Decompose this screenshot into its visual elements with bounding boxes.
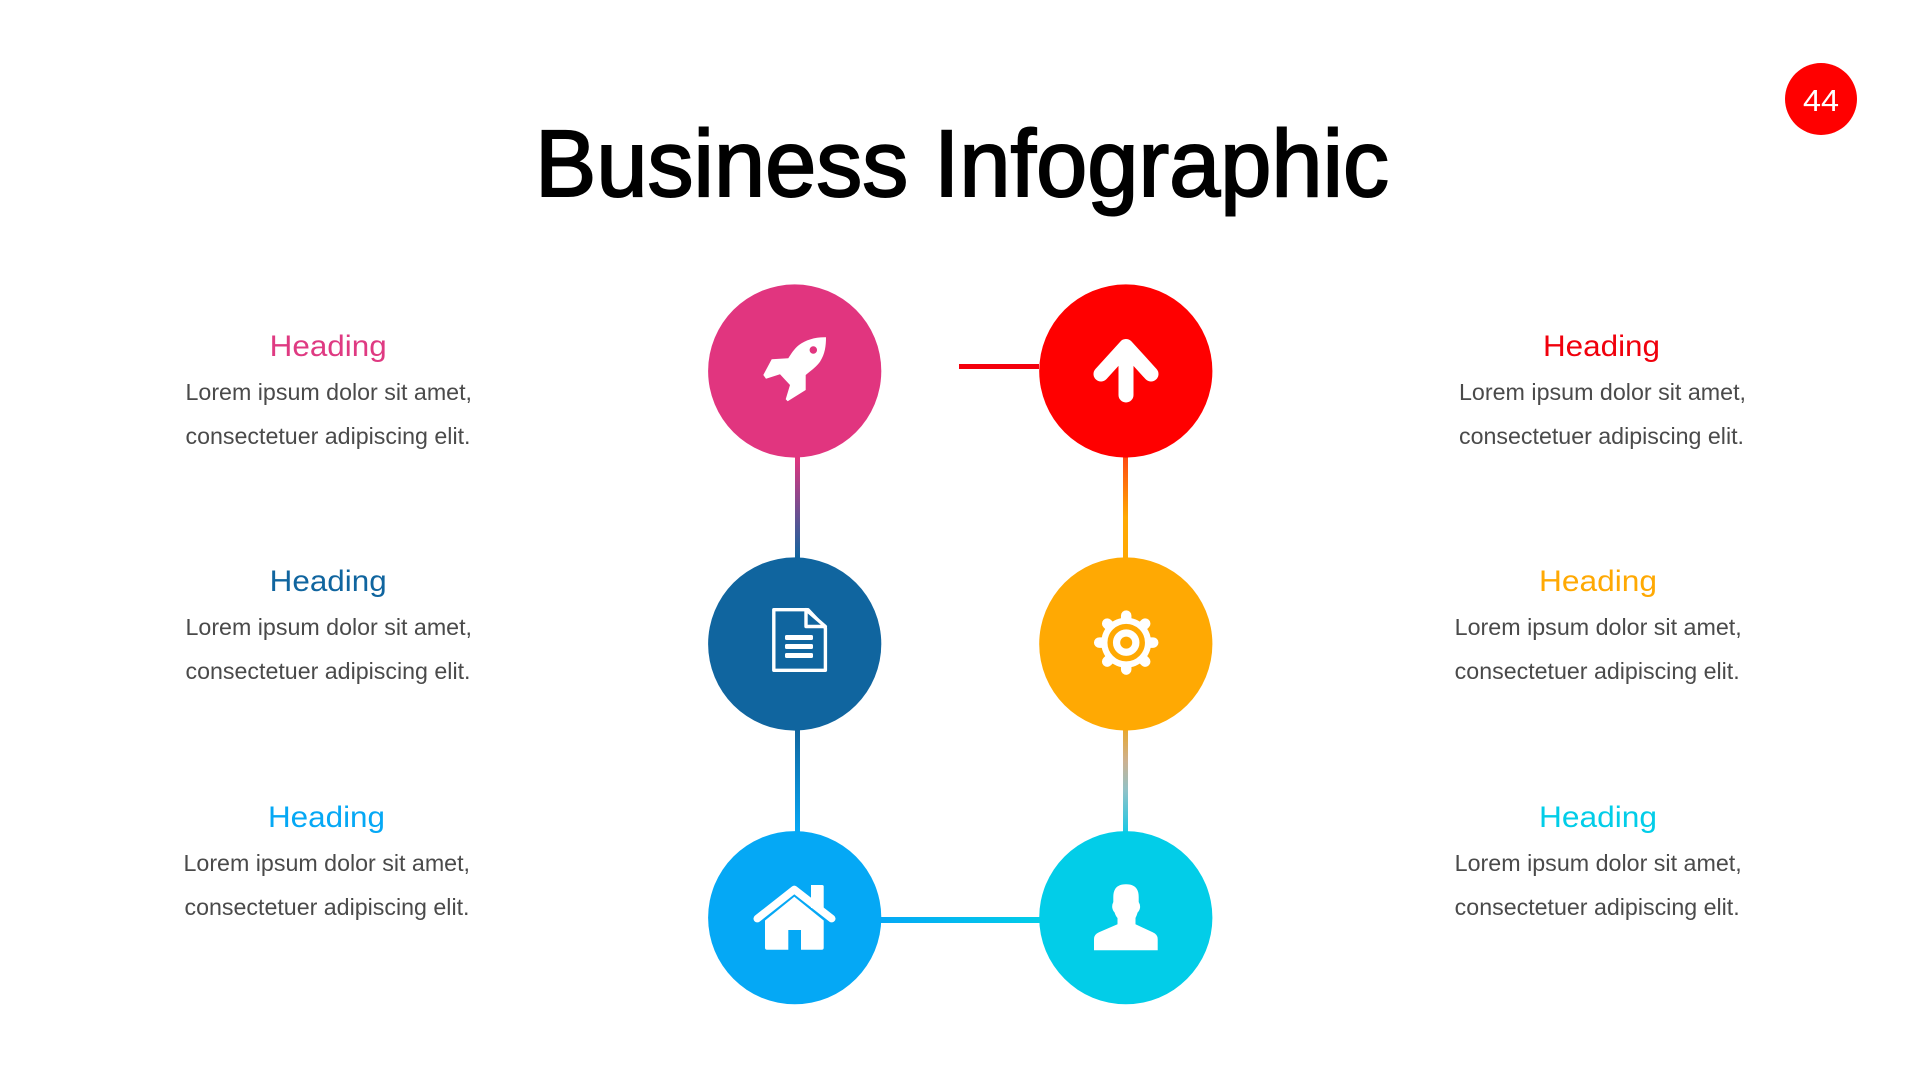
icon: person xyxy=(1094,884,1158,950)
node: pink rocket xyxy=(708,284,881,458)
connector: pink to navy xyxy=(795,456,800,559)
text block: pink heading xyxy=(186,330,472,449)
text block: cyan heading: Heading xyxy=(1539,801,1657,834)
connector: navy to sky xyxy=(795,729,800,833)
connector: red stub xyxy=(959,364,1039,369)
text block: orange heading: consectetuer adipiscing elit. xyxy=(1455,658,1740,684)
text block: pink heading: Lorem ipsum dolor sit amet, xyxy=(186,379,472,405)
node: red arrow xyxy=(1039,284,1212,458)
text block: red heading: consectetuer adipiscing elit. xyxy=(1459,423,1744,449)
text block: cyan heading xyxy=(1455,801,1742,920)
title: Business Infographic xyxy=(535,111,1389,217)
text block: cyan heading: consectetuer adipiscing elit. xyxy=(1455,894,1740,920)
icon: gear xyxy=(1099,616,1153,670)
text block: sky heading: Heading xyxy=(268,801,385,834)
text block: orange heading xyxy=(1455,565,1742,684)
node: sky blue house xyxy=(708,831,881,1004)
text block: red heading xyxy=(1459,330,1746,449)
text block: pink heading: Heading xyxy=(270,330,387,363)
icon: rocket xyxy=(763,337,826,401)
text block: sky heading: Lorem ipsum dolor sit amet, xyxy=(184,850,470,876)
node: navy document xyxy=(708,557,881,731)
node: cyan person xyxy=(1039,831,1212,1004)
text block: sky heading xyxy=(184,801,470,920)
icon: up arrow xyxy=(1101,346,1151,395)
text block: cyan heading: Lorem ipsum dolor sit amet, xyxy=(1455,850,1742,876)
text block: sky heading: consectetuer adipiscing elit. xyxy=(184,894,470,920)
connector: red to orange xyxy=(1123,456,1128,559)
node: orange gear xyxy=(1039,557,1212,731)
connector: sky to cyan xyxy=(878,917,1042,923)
text block: orange heading: Heading xyxy=(1539,565,1657,598)
text block: pink heading: consectetuer adipiscing elit. xyxy=(186,423,470,449)
text block: navy heading: consectetuer adipiscing elit. xyxy=(186,658,470,684)
text block: navy heading xyxy=(186,565,472,684)
text block: red heading: Heading xyxy=(1543,330,1660,363)
text block: orange heading: Lorem ipsum dolor sit amet, xyxy=(1455,614,1742,640)
text block: navy heading: Lorem ipsum dolor sit amet, xyxy=(186,614,472,640)
icon: house xyxy=(757,885,832,950)
connector: orange to cyan xyxy=(1123,729,1128,833)
icon: document xyxy=(774,610,825,670)
text block: red heading: Lorem ipsum dolor sit amet, xyxy=(1459,379,1746,405)
text block: navy heading: Heading xyxy=(270,565,387,598)
page number badge xyxy=(1785,63,1857,135)
page number badge: 44 xyxy=(1803,83,1839,118)
